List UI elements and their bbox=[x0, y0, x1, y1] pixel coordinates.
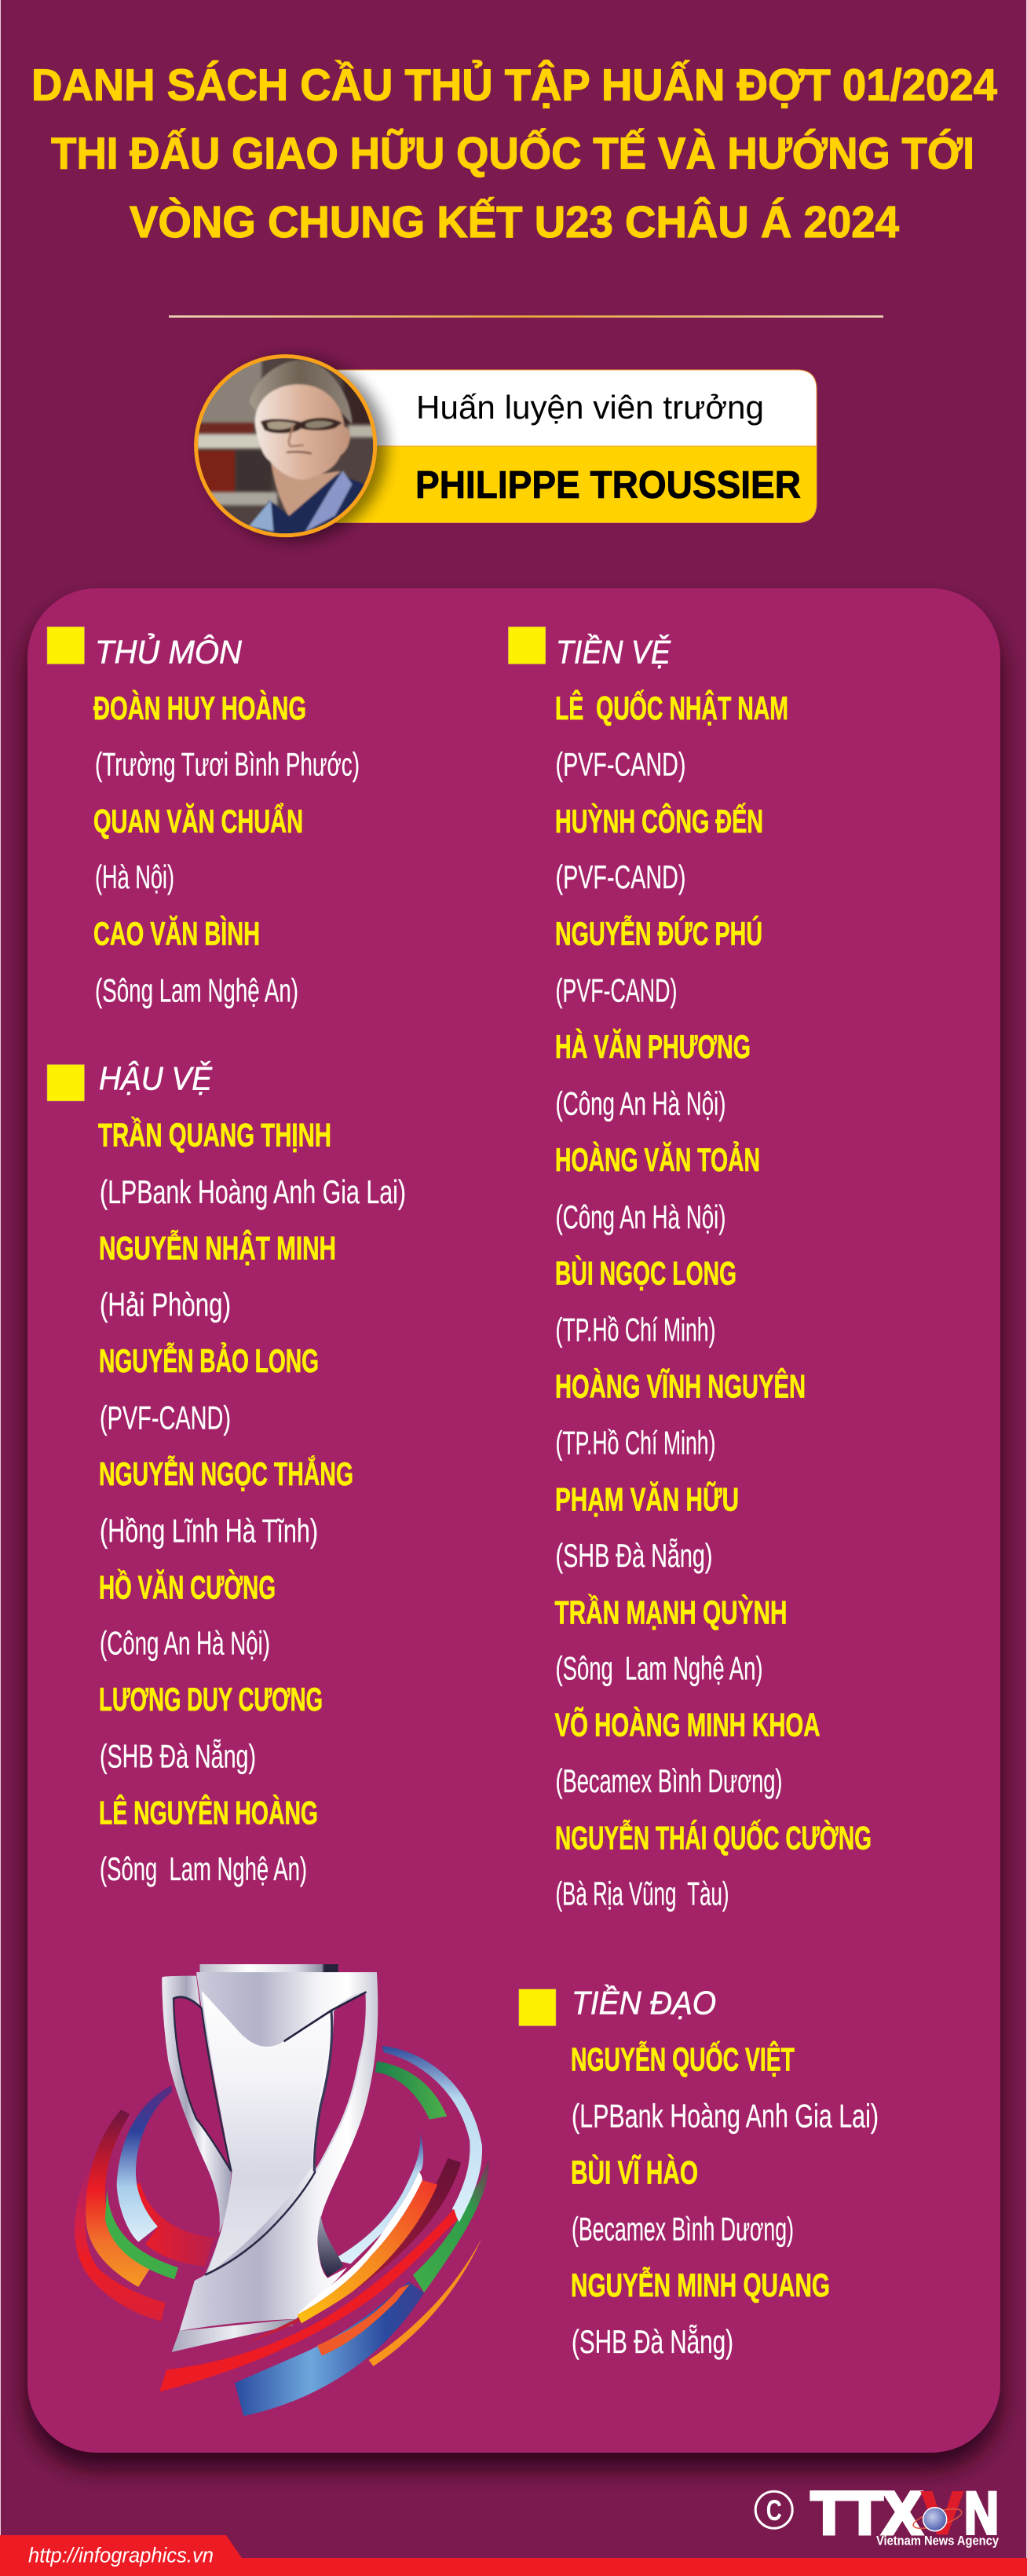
player: Đoàn Huy Hoàng: ĐOÀN HUY HOÀNG bbox=[93, 690, 306, 726]
player: Nguyễn Minh Quang: (SHB Đà Nẵng) bbox=[572, 2323, 733, 2360]
title: VÒNG CHUNG KẾT U23 CHÂU Á 2024 bbox=[130, 197, 900, 247]
heading: tiền đạo bbox=[519, 1984, 716, 2026]
coach portrait bbox=[194, 353, 379, 540]
player: Nguyễn Ngọc Thắng: (Hồng Lĩnh Hà Tĩnh) bbox=[100, 1513, 318, 1550]
player: Hoàng Văn Toản bbox=[555, 1140, 760, 1235]
player: Lê Nguyên Hoàng: LÊ NGUYÊN HOÀNG bbox=[99, 1794, 318, 1831]
player: Quan Văn Chuẩn: QUAN VĂN CHUẨN bbox=[93, 802, 303, 840]
player: Bùi Ngọc Long: (TP.Hồ Chí Minh) bbox=[556, 1311, 716, 1348]
player: Nguyễn Nhật Minh bbox=[99, 1228, 336, 1323]
player: Phạm Văn Hữu: PHẠM VĂN HỮU bbox=[555, 1480, 739, 1517]
player: Đoàn Huy Hoàng bbox=[93, 690, 360, 783]
heading: hậu vệ: HẬU VỆ bbox=[99, 1060, 213, 1096]
player: Hoàng Văn Toản: (Công An Hà Nội) bbox=[556, 1198, 725, 1235]
rings behind trophy bbox=[75, 2046, 489, 2322]
player: Võ Hoàng Minh Khoa: (Becamex Bình Dương) bbox=[556, 1762, 782, 1799]
title: THI ĐẤU GIAO HỮU QUỐC TẾ VÀ HƯỚNG TỚI bbox=[51, 129, 974, 178]
player: Huỳnh Công Đến: (PVF-CAND) bbox=[556, 858, 686, 895]
player: Bùi Vĩ Hào: BÙI VĨ HÀO bbox=[571, 2153, 698, 2190]
coach card bbox=[194, 353, 817, 542]
heading: thủ môn: THỦ MÔN bbox=[95, 632, 243, 671]
trophy logo bbox=[75, 1964, 489, 2416]
player: Lê Nguyên Hoàng bbox=[99, 1794, 318, 1887]
player: Hồ Văn Cường: (Công An Hà Nội) bbox=[100, 1625, 270, 1662]
player: Nguyễn Nhật Minh: NGUYỄN NHẬT MINH bbox=[99, 1228, 336, 1266]
player: Hoàng Vĩnh Nguyên: HOÀNG VĨNH NGUYÊN bbox=[555, 1367, 806, 1405]
player: Nguyễn Bảo Long: (PVF-CAND) bbox=[100, 1400, 231, 1436]
player: Quan Văn Chuẩn bbox=[93, 802, 303, 895]
player: Lê Quốc Nhật Nam: (PVF-CAND) bbox=[556, 746, 686, 783]
player: Võ Hoàng Minh Khoa bbox=[554, 1706, 820, 1799]
copyright icon bbox=[755, 2491, 792, 2528]
player: Hà Văn Phương: HÀ VĂN PHƯƠNG bbox=[555, 1028, 751, 1065]
player: Nguyễn Thái Quốc Cường: NGUYỄN THÁI QUỐC CƯỜNG bbox=[555, 1818, 872, 1856]
player: Trần Quang Thịnh: TRẦN QUANG THỊNH bbox=[98, 1117, 331, 1154]
player: Nguyễn Thái Quốc Cường: (Bà Rịa Vũng Tàu) bbox=[556, 1875, 729, 1912]
heading: tiền đạo: TIỀN ĐẠO bbox=[572, 1984, 716, 2021]
trophy body bbox=[162, 1964, 378, 2352]
player: Lương Duy Cương: (SHB Đà Nẵng) bbox=[100, 1737, 256, 1775]
copyright icon: C bbox=[766, 2494, 782, 2527]
TTXVN logo: Vietnam News Agency bbox=[876, 2534, 1000, 2549]
section: tiền vệ bbox=[508, 627, 872, 1912]
player: Hoàng Vĩnh Nguyên: (TP.Hồ Chí Minh) bbox=[556, 1425, 716, 1462]
title: DANH SÁCH CẦU THỦ TẬP HUẤN ĐỢT 01/2024 bbox=[31, 60, 998, 110]
heading: hậu vệ bbox=[47, 1060, 213, 1101]
player: Trần Mạnh Quỳnh: (Sông Lam Nghệ An) bbox=[556, 1650, 763, 1687]
player: Lê Quốc Nhật Nam: LÊ QUỐC NHẬT NAM bbox=[555, 689, 788, 726]
coach name box bbox=[267, 370, 817, 523]
player: Bùi Vĩ Hào: (Becamex Bình Dương) bbox=[572, 2210, 794, 2247]
player: Bùi Ngọc Long: BÙI NGỌC LONG bbox=[555, 1253, 736, 1291]
player: Hoàng Văn Toản: HOÀNG VĂN TOẢN bbox=[555, 1140, 760, 1178]
player: Nguyễn Thái Quốc Cường bbox=[555, 1818, 872, 1912]
player: Nguyễn Đức Phú: NGUYỄN ĐỨC PHÚ bbox=[555, 914, 762, 952]
player: Võ Hoàng Minh Khoa: VÕ HOÀNG MINH KHOA bbox=[554, 1706, 820, 1744]
heading: tiền vệ bbox=[508, 627, 671, 671]
player: Cao Văn Bình bbox=[93, 915, 298, 1008]
TTXVN logo: V bbox=[922, 2480, 963, 2547]
main panel bbox=[27, 588, 1000, 2453]
player: Hà Văn Phương bbox=[555, 1028, 751, 1122]
player: Quan Văn Chuẩn: (Hà Nội) bbox=[95, 858, 174, 895]
section: thủ môn bbox=[47, 627, 360, 1008]
player: Nguyễn Bảo Long: NGUYỄN BẢO LONG bbox=[99, 1341, 319, 1379]
player: Lương Duy Cương bbox=[99, 1681, 323, 1775]
player: Cao Văn Bình: CAO VĂN BÌNH bbox=[93, 915, 260, 952]
player: Nguyễn Minh Quang: NGUYỄN MINH QUANG bbox=[571, 2266, 830, 2303]
player: Nguyễn Quốc Việt bbox=[571, 2040, 879, 2134]
player: Nguyễn Đức Phú: (PVF-CAND) bbox=[556, 972, 677, 1008]
player: Nguyễn Ngọc Thắng: NGUYỄN NGỌC THẮNG bbox=[99, 1454, 353, 1492]
player: Hồ Văn Cường: HỒ VĂN CƯỜNG bbox=[99, 1568, 276, 1605]
coach role: Huấn luyện viên trưởng bbox=[416, 389, 764, 426]
player: Bùi Vĩ Hào bbox=[571, 2153, 794, 2247]
player: Phạm Văn Hữu: (SHB Đà Nẵng) bbox=[556, 1537, 713, 1574]
player: Nguyễn Bảo Long bbox=[99, 1341, 319, 1436]
player: Lê Nguyên Hoàng: (Sông Lam Nghệ An) bbox=[100, 1850, 307, 1887]
footer url: http://infographics.vn bbox=[28, 2543, 214, 2567]
player: Nguyễn Minh Quang bbox=[571, 2266, 830, 2360]
TTXVN logo: TTX bbox=[811, 2480, 922, 2547]
section: hậu vệ bbox=[47, 1060, 406, 1887]
player: Bùi Ngọc Long bbox=[555, 1253, 736, 1348]
coach name: PHILIPPE TROUSSIER bbox=[415, 464, 801, 507]
player: Cao Văn Bình: (Sông Lam Nghệ An) bbox=[95, 972, 298, 1008]
player: Nguyễn Nhật Minh: (Hải Phòng) bbox=[100, 1286, 231, 1323]
player: Trần Quang Thịnh: (LPBank Hoàng Anh Gia Lai) bbox=[100, 1173, 406, 1210]
player: Hồ Văn Cường bbox=[99, 1568, 276, 1662]
player: Phạm Văn Hữu bbox=[555, 1480, 739, 1574]
player: Nguyễn Quốc Việt: (LPBank Hoàng Anh Gia Lai) bbox=[572, 2097, 879, 2134]
player: Trần Quang Thịnh bbox=[98, 1117, 406, 1210]
TTXVN logo: N bbox=[964, 2480, 999, 2547]
player: Lê Quốc Nhật Nam bbox=[555, 689, 788, 783]
heading: tiền vệ: TIỀN VỆ bbox=[556, 634, 671, 671]
player: Hà Văn Phương: (Công An Hà Nội) bbox=[556, 1085, 725, 1122]
player: Huỳnh Công Đến: HUỲNH CÔNG ĐẾN bbox=[555, 802, 763, 840]
player: Đoàn Huy Hoàng: (Trường Tươi Bình Phước) bbox=[95, 746, 360, 783]
player: Lương Duy Cương: LƯƠNG DUY CƯƠNG bbox=[99, 1681, 323, 1718]
player: Nguyễn Đức Phú bbox=[555, 914, 762, 1008]
player: Huỳnh Công Đến bbox=[555, 802, 763, 895]
heading: thủ môn bbox=[47, 627, 243, 671]
rings in front of trophy bbox=[159, 2158, 484, 2416]
player: Trần Mạnh Quỳnh: TRẦN MẠNH QUỲNH bbox=[554, 1594, 787, 1630]
icon: globe bbox=[912, 2505, 963, 2532]
section: tiền đạo bbox=[519, 1984, 879, 2360]
player: Hoàng Vĩnh Nguyên bbox=[555, 1367, 806, 1462]
TTXVN logo bbox=[811, 2480, 1000, 2549]
footer bar bbox=[0, 2535, 1027, 2576]
player: Trần Mạnh Quỳnh bbox=[554, 1594, 787, 1687]
player: Nguyễn Ngọc Thắng bbox=[99, 1454, 353, 1550]
player: Nguyễn Quốc Việt: NGUYỄN QUỐC VIỆT bbox=[571, 2040, 795, 2078]
title bbox=[31, 60, 998, 247]
